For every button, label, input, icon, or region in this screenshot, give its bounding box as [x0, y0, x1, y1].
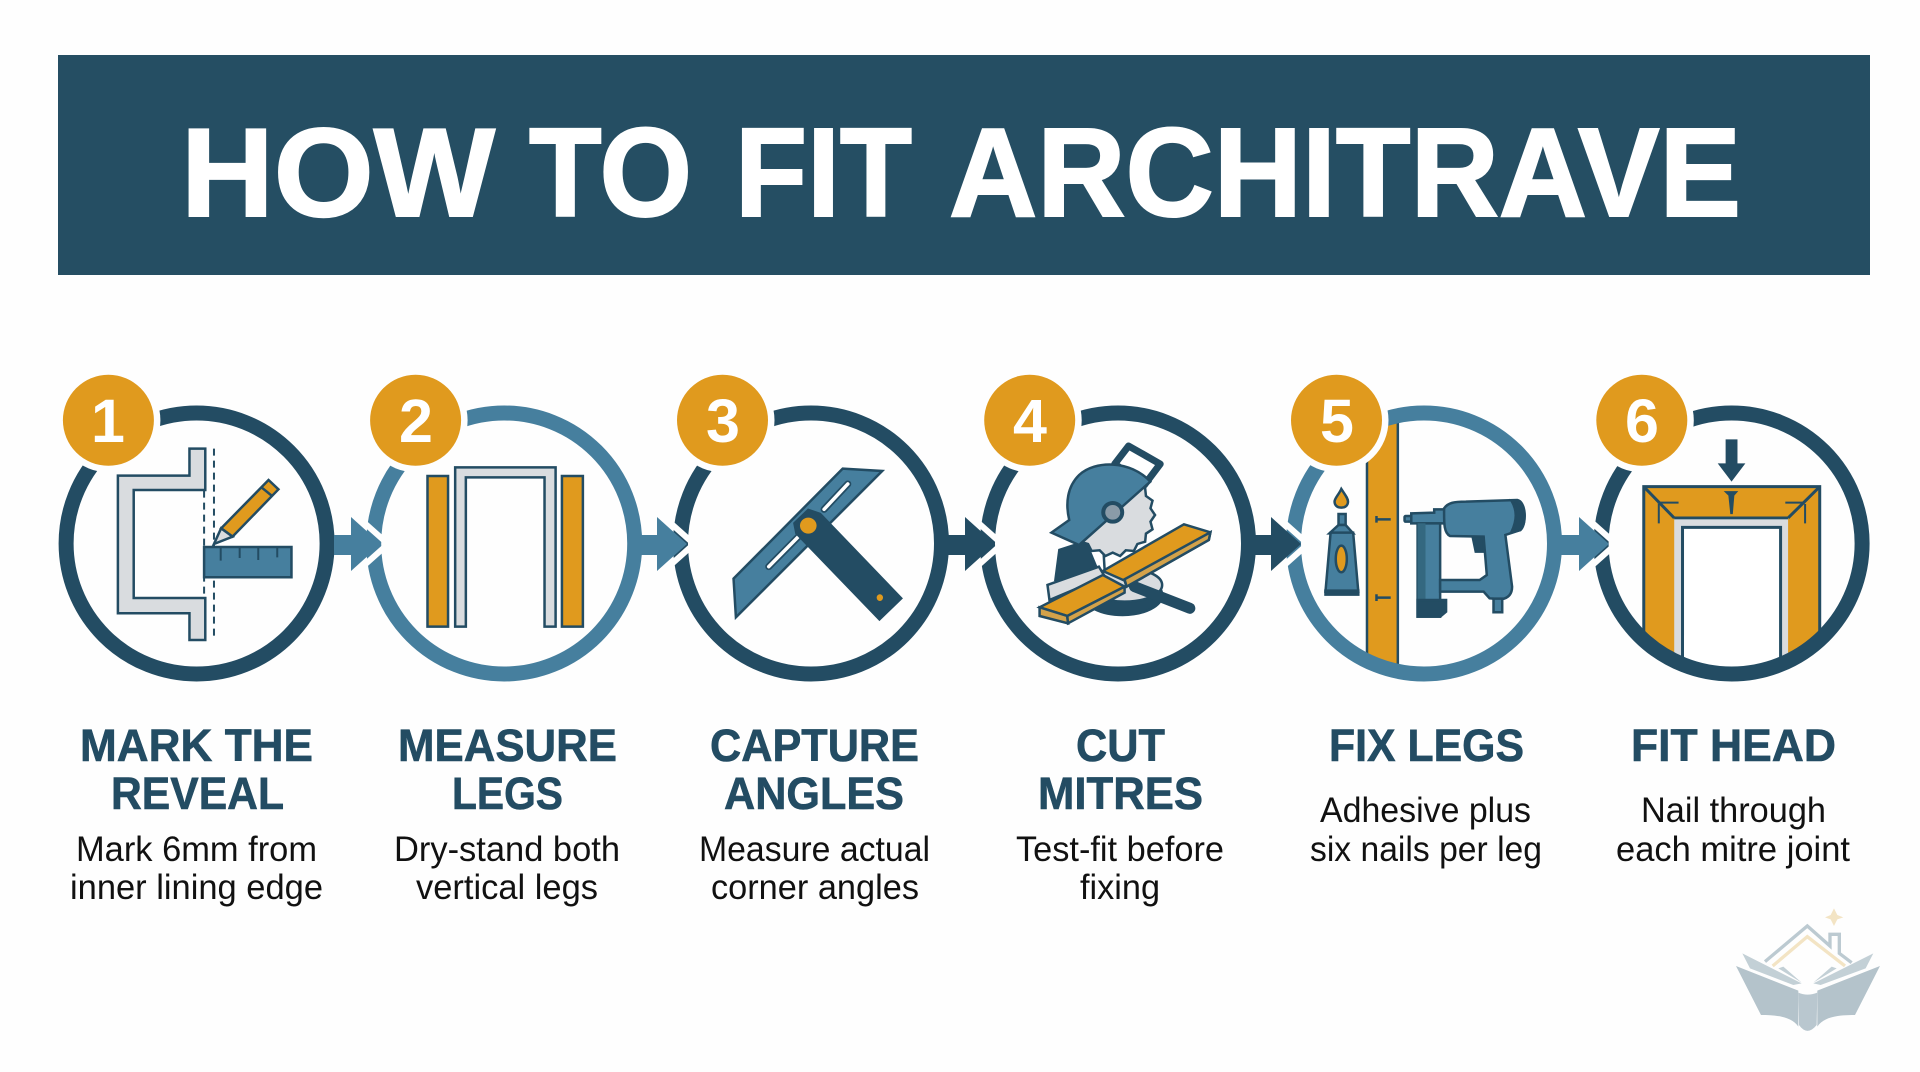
- icon: sliding bevel: [734, 469, 901, 619]
- step 6 badge: [1590, 368, 1694, 472]
- step 3 text: [699, 720, 930, 907]
- title banner: [58, 55, 1870, 275]
- step 2 ring: [374, 413, 635, 674]
- step 4 badge: 4: [1013, 387, 1047, 455]
- step 1 text: Mark 6mm from: [76, 829, 317, 869]
- step 2 text: Dry-stand both: [394, 829, 620, 869]
- logo watermark: [1736, 908, 1880, 1031]
- title: [181, 102, 1741, 243]
- step 6 text: each mitre joint: [1616, 829, 1850, 869]
- step 3 badge: 3: [706, 387, 740, 455]
- icon: measure legs: [427, 467, 583, 627]
- step 6 text: Nail through: [1641, 790, 1826, 830]
- step 2 text: vertical legs: [416, 867, 598, 907]
- step 5 badge: [1284, 368, 1388, 472]
- step 1 text: inner lining edge: [70, 867, 323, 907]
- step 6 badge: 6: [1625, 387, 1659, 455]
- step 4 text: Test-fit before: [1016, 829, 1224, 869]
- arrow 2 to 3: [641, 517, 687, 571]
- icon: fit head: [1644, 487, 1820, 674]
- step 4 text: MITRES: [1038, 768, 1203, 819]
- step 1 text: MARK THE: [80, 720, 313, 771]
- arrow 3 to 4: [948, 517, 995, 571]
- icon: mitre saw: [1040, 446, 1210, 623]
- step 2 text: LEGS: [452, 768, 563, 819]
- title: FIT: [735, 102, 912, 243]
- step 6 text: FIT HEAD: [1631, 720, 1836, 771]
- step 5 text: Adhesive plus: [1320, 790, 1531, 830]
- arrow 4 to 5: [1255, 517, 1301, 571]
- step 3 badge: [670, 368, 774, 472]
- step 6 text: [1616, 720, 1850, 869]
- step 1 badge: 1: [91, 387, 125, 455]
- step 3 text: CAPTURE: [710, 720, 919, 771]
- icon: down arrow: [1718, 439, 1745, 482]
- step 2 badge: 2: [399, 387, 433, 455]
- step 2 text: MEASURE: [398, 720, 617, 771]
- step 6 ring: [1601, 413, 1862, 674]
- step 4 text: CUT: [1076, 720, 1165, 771]
- step 2 text: [394, 720, 620, 907]
- title: HOW: [181, 102, 495, 243]
- step 3 ring: [680, 413, 942, 674]
- step 4 ring: [988, 413, 1248, 674]
- step 3 text: corner angles: [711, 867, 919, 907]
- step 3 text: ANGLES: [724, 768, 904, 819]
- step 1 badge: [56, 368, 160, 472]
- step 3 text: Measure actual: [699, 829, 930, 869]
- arrow 5 to 6: [1561, 517, 1609, 571]
- step 4 badge: [978, 368, 1082, 472]
- step 5 ring: [1294, 413, 1554, 674]
- step 1 ring: [66, 413, 327, 674]
- arrow 1 to 2: [334, 517, 381, 571]
- step 5 text: six nails per leg: [1310, 829, 1542, 869]
- step 4 text: [1016, 720, 1224, 907]
- step 1 text: [70, 720, 323, 907]
- icon: fix legs: [1325, 417, 1525, 665]
- arrow tip gaps: [351, 511, 1616, 577]
- step 5 text: FIX LEGS: [1329, 720, 1524, 771]
- step 1 text: REVEAL: [111, 768, 284, 819]
- step 5 badge: 5: [1320, 387, 1354, 455]
- step 2 badge: [364, 368, 468, 472]
- icon: mark the reveal: [118, 449, 291, 640]
- title: ARCHITRAVE: [949, 102, 1741, 243]
- step 5 text: [1310, 720, 1542, 869]
- title: TO: [529, 102, 692, 243]
- step 4 text: fixing: [1080, 867, 1160, 907]
